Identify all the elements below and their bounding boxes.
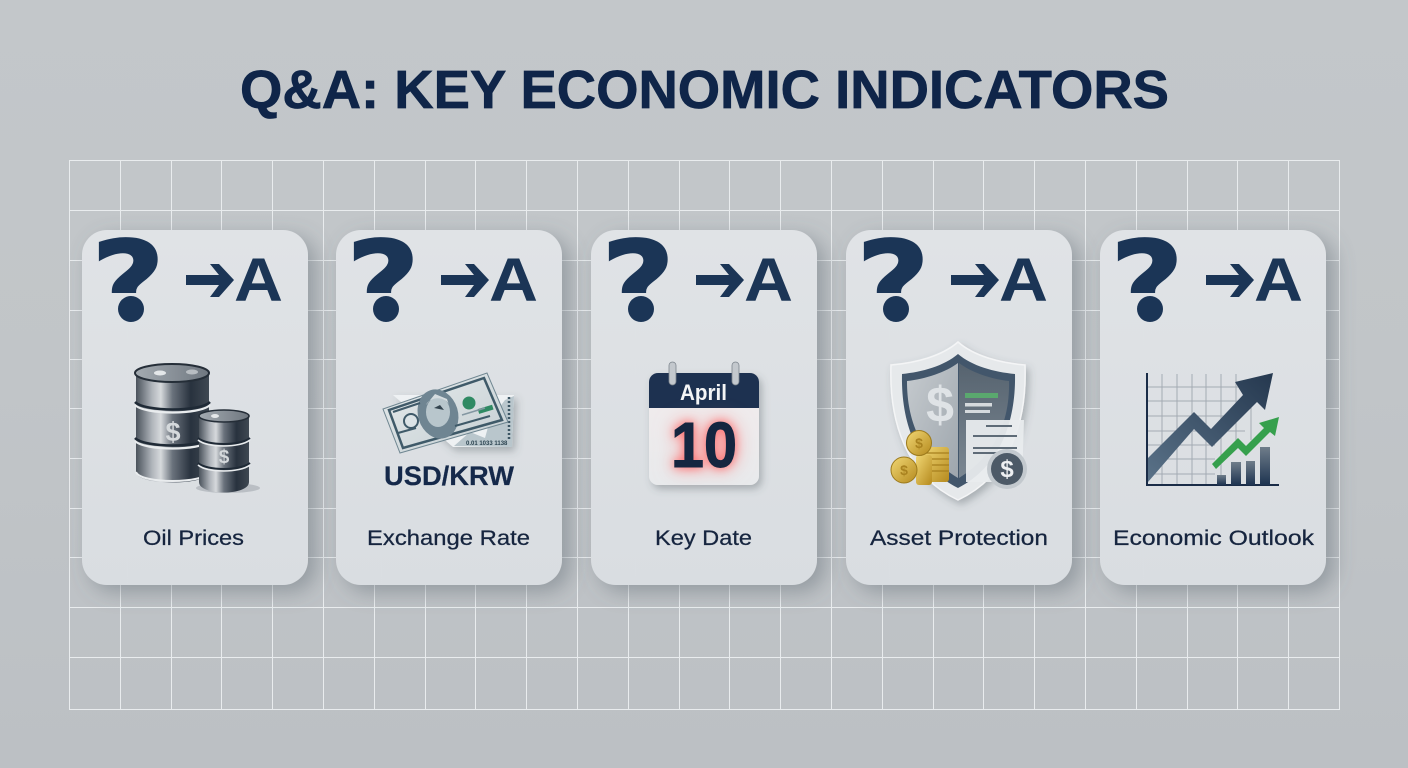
panel: asset protection <box>846 218 1072 585</box>
panel: exchange rate <box>336 218 562 585</box>
icon: calendar <box>649 362 759 485</box>
currency pair label: USD/KRW <box>384 461 515 491</box>
icon: oil barrels: $ <box>165 417 181 447</box>
icon: oil barrels: $ <box>219 447 230 468</box>
icon: shield with coins and document: $ <box>1000 456 1014 483</box>
arrow to answer <box>1206 246 1303 314</box>
question mark <box>98 237 158 322</box>
icon: banknotes <box>383 373 515 491</box>
question mark <box>608 237 668 322</box>
question mark: ? <box>346 218 420 349</box>
question mark: ? <box>91 218 165 349</box>
panel: oil prices <box>82 218 308 585</box>
icon: calendar: 10 <box>671 409 737 481</box>
label: Asset Protection <box>870 527 1048 550</box>
arrow to answer <box>696 246 793 314</box>
icon: shield with coins and document <box>891 342 1027 500</box>
icon: growth chart <box>1147 373 1279 485</box>
arrow to answer <box>441 246 538 314</box>
title: Q&A: KEY ECONOMIC INDICATORS <box>240 60 1169 120</box>
question mark <box>354 237 413 322</box>
icon: banknotes: 0.01 1033 1138 <box>466 441 508 447</box>
icon: shield with coins and document: $ <box>926 377 954 433</box>
question mark: ? <box>856 218 930 349</box>
label: Key Date <box>655 527 752 550</box>
question mark <box>1118 237 1177 322</box>
arrow to answer <box>951 246 1048 314</box>
panel: key date <box>591 218 817 585</box>
icon: oil barrels <box>135 364 260 493</box>
arrow to answer: A <box>489 246 538 314</box>
arrow to answer <box>186 246 283 314</box>
label: Economic Outlook <box>1113 527 1315 550</box>
label: Exchange Rate <box>367 527 530 550</box>
arrow to answer: A <box>234 246 283 314</box>
panel: economic outlook <box>1100 218 1326 585</box>
arrow to answer: A <box>1254 246 1303 314</box>
icon: calendar: April <box>680 380 727 405</box>
question mark: ? <box>601 218 675 349</box>
question mark <box>864 237 923 322</box>
label: Oil Prices <box>143 527 244 550</box>
arrow to answer: A <box>744 246 793 314</box>
icon: shield with coins and document: $ <box>915 435 923 451</box>
arrow to answer: A <box>999 246 1048 314</box>
icon: shield with coins and document: $ <box>900 462 908 478</box>
question mark: ? <box>1110 218 1184 349</box>
